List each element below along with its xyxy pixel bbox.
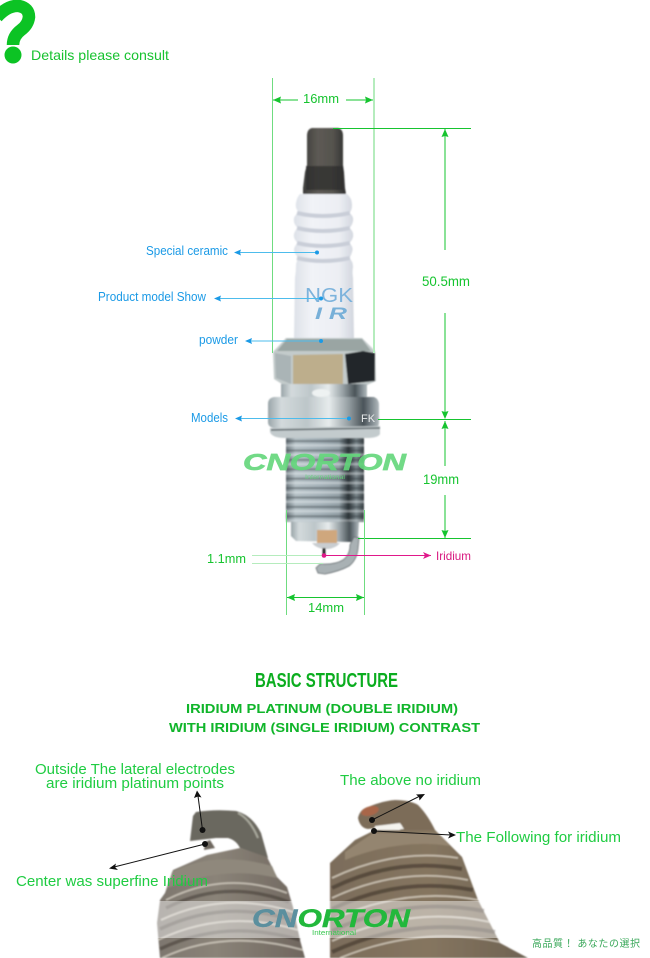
icon: question mark (0, 6, 29, 64)
dimension: 14mm: 14mm (308, 601, 344, 615)
arrow: center electrode (109, 841, 208, 870)
labels and arrows: left plug (16, 761, 235, 890)
photo: left plug double iridium (157, 810, 305, 958)
callout: iridium: Iridium (436, 549, 471, 563)
callout: special ceramic (146, 244, 319, 258)
text: outside lateral electrodes: Outside The lateral electrodes (35, 761, 235, 778)
watermark: CNORTON upper: International (305, 475, 345, 481)
callout: iridium (322, 549, 471, 563)
photo: right plug single iridium (330, 800, 528, 958)
flange (268, 397, 379, 428)
callout: powder: powder (199, 333, 238, 347)
watermark: CNORTON lower: International (312, 930, 357, 937)
callout: product model show (98, 290, 323, 304)
watermark: CNORTON upper (243, 449, 407, 481)
threaded section (286, 438, 364, 522)
subheading (169, 701, 480, 735)
spark plug photo (268, 128, 380, 574)
ceramic insulator (294, 194, 354, 340)
dimension: 1.1mm (207, 552, 323, 566)
labels and arrows: right plug (340, 772, 621, 846)
callout: special ceramic: Special ceramic (146, 244, 228, 258)
lower shank (291, 522, 359, 542)
watermark: CNORTON lower: CN ORTON (252, 905, 411, 933)
ceramic logo NGK IR (305, 285, 354, 323)
text: iridium platinum points: are iridium platinum points (46, 775, 224, 792)
dimension: 50.5mm (333, 128, 471, 419)
terminal cap (303, 128, 346, 194)
watermark: CNORTON upper: CNORTON (243, 449, 407, 475)
ceramic logo NGK IR: NGK (305, 285, 354, 307)
dimension: 16mm: 16mm (303, 92, 339, 106)
shell left (157, 848, 305, 958)
ceramic logo NGK IR: I R (315, 304, 348, 323)
shell right (330, 830, 528, 958)
blue callouts (98, 244, 351, 425)
callout: models (191, 411, 351, 425)
text: tagline japanese: 高品質！ あなたの選択 (532, 937, 640, 950)
translucent watermark band (0, 901, 650, 938)
dimension: 1.1mm: 1.1mm (207, 552, 246, 566)
text: above no iridium: The above no iridium (340, 772, 481, 789)
callout: models: Models (191, 411, 228, 425)
dimension lines (207, 78, 471, 615)
neck (281, 384, 367, 398)
ground electrode left (190, 810, 268, 858)
dimension: 16mm (272, 78, 375, 353)
dimension: 50.5mm: 50.5mm (422, 273, 470, 289)
text: center superfine iridium: Center was superfine Iridium (16, 873, 208, 890)
ground electrode right (358, 800, 436, 832)
arrow: above (369, 794, 425, 823)
arrow: following (371, 828, 456, 838)
arrow: lateral electrode (194, 790, 206, 833)
dimension: 19mm (358, 420, 471, 538)
subheading: WITH IRIDIUM (SINGLE IRIDIUM) CONTRAST (169, 720, 480, 735)
ground electrode (316, 537, 359, 574)
callout: powder (199, 333, 323, 347)
dimension: 14mm (286, 510, 365, 615)
dimension: 19mm: 19mm (423, 471, 459, 487)
text: following for iridium: The Following for iridium (456, 829, 621, 846)
flange marking: FK (361, 413, 376, 425)
subheading: IRIDIUM PLATINUM (DOUBLE IRIDIUM) (186, 701, 458, 716)
text: details please consult: Details please consult (31, 47, 169, 63)
heading: basic structure: BASIC STRUCTURE (255, 670, 398, 692)
callout: product model show: Product model Show (98, 290, 207, 304)
hex nut (273, 338, 376, 386)
